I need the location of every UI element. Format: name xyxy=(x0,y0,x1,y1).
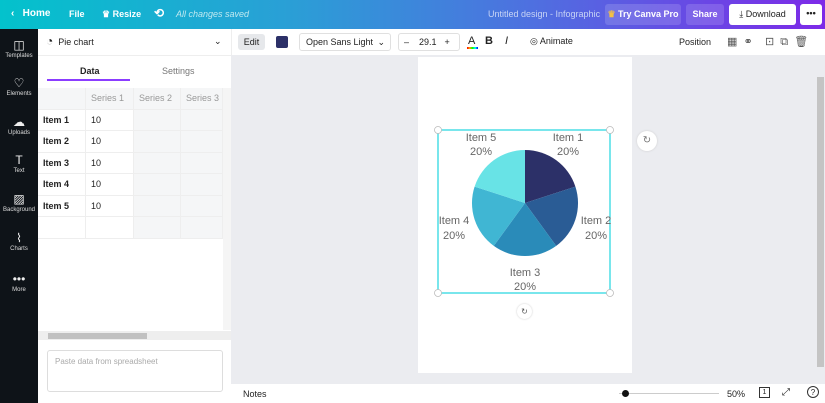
bottom bar: Notes xyxy=(243,389,267,399)
pie chart xyxy=(434,126,614,297)
pie chart: Item 4 xyxy=(439,215,469,227)
data table: 10 xyxy=(91,200,101,210)
bottom bar: ? xyxy=(811,388,815,397)
sidebar: Charts xyxy=(10,246,28,252)
data table: 10 xyxy=(91,114,101,124)
add comment button: ↻ xyxy=(643,135,651,146)
pie chart: Item 2 xyxy=(581,215,611,227)
data panel: ⌄ xyxy=(214,36,222,46)
data table xyxy=(38,88,223,238)
paste box: Paste data from spreadsheet xyxy=(55,357,158,366)
data panel: ◔ Pie chart xyxy=(46,34,94,48)
pie chart: 20% xyxy=(514,281,536,293)
rotate handle xyxy=(517,304,532,319)
top bar: ‹ Home xyxy=(11,8,50,19)
sidebar: Background xyxy=(3,207,35,213)
pie chart: 20% xyxy=(443,230,465,242)
bottom bar: 50% xyxy=(727,389,745,399)
top bar: Share xyxy=(692,9,718,19)
pie chart: Item 5 xyxy=(466,132,496,144)
sidebar: ◫ xyxy=(13,38,25,52)
toolbar: Edit xyxy=(244,37,259,47)
sidebar: Text xyxy=(13,168,24,174)
vertical scrollbar xyxy=(816,57,825,373)
paste box xyxy=(47,350,223,392)
sidebar: ♡ xyxy=(14,76,24,90)
top bar: ⟲ xyxy=(154,6,164,20)
sidebar: Templates xyxy=(5,53,33,59)
bottom bar: ⤢ xyxy=(782,387,790,398)
pie chart: 20% xyxy=(585,230,607,242)
bottom bar: 1 xyxy=(763,389,766,396)
sidebar: ••• xyxy=(13,272,25,286)
add comment button xyxy=(637,131,657,151)
data table: 10 xyxy=(91,136,101,146)
sidebar xyxy=(0,29,38,403)
data table: Item 4 xyxy=(43,179,69,189)
data panel: Data xyxy=(80,66,100,76)
toolbar: I xyxy=(505,35,508,47)
toolbar: ◎ Animate xyxy=(530,36,573,46)
data table: Item 3 xyxy=(43,158,69,168)
toolbar: ⌄ xyxy=(377,37,385,47)
sidebar: More xyxy=(12,287,26,293)
data table: Series 1 xyxy=(91,93,124,103)
pie chart: 20% xyxy=(557,146,579,158)
data table: Item 1 xyxy=(43,114,69,124)
data table: Series 2 xyxy=(139,93,172,103)
data table: Item 5 xyxy=(43,200,69,210)
top bar: All changes saved xyxy=(176,9,249,19)
toolbar xyxy=(231,29,825,55)
pie chart: 20% xyxy=(470,146,492,158)
top bar: ••• xyxy=(806,8,816,18)
data table: Series 3 xyxy=(186,93,219,103)
toolbar: ▦ ⚭ ⊡ ⧉ 🗑 xyxy=(727,36,808,48)
bottom bar xyxy=(231,384,825,403)
sidebar: ☁ xyxy=(13,115,25,129)
toolbar: B xyxy=(485,35,493,47)
data table: 10 xyxy=(91,179,101,189)
top bar: Untitled design - Infographic xyxy=(488,9,600,19)
sidebar: Elements xyxy=(6,91,32,97)
pie chart: Item 3 xyxy=(510,267,540,279)
top bar: ♛ Try Canva Pro xyxy=(607,9,679,19)
sidebar: T xyxy=(15,153,23,167)
toolbar: A xyxy=(468,35,475,47)
rotate handle: ↻ xyxy=(521,307,528,316)
sidebar: ▨ xyxy=(13,192,25,206)
sidebar: Uploads xyxy=(8,130,30,136)
sidebar: ⌇ xyxy=(16,231,22,245)
pie chart: Item 1 xyxy=(553,132,583,144)
data panel xyxy=(38,29,231,403)
toolbar: Position xyxy=(679,37,711,47)
toolbar: Open Sans Light xyxy=(306,37,373,47)
data table: 10 xyxy=(91,158,101,168)
top bar: ⤓ Download xyxy=(739,9,786,19)
data panel: Settings xyxy=(162,66,195,76)
page xyxy=(418,57,632,373)
data table: Item 2 xyxy=(43,136,69,146)
top bar: File xyxy=(69,9,85,19)
top bar: ♛ Resize xyxy=(102,9,141,19)
toolbar: – 29.1 + xyxy=(404,37,450,47)
top bar xyxy=(0,0,825,29)
